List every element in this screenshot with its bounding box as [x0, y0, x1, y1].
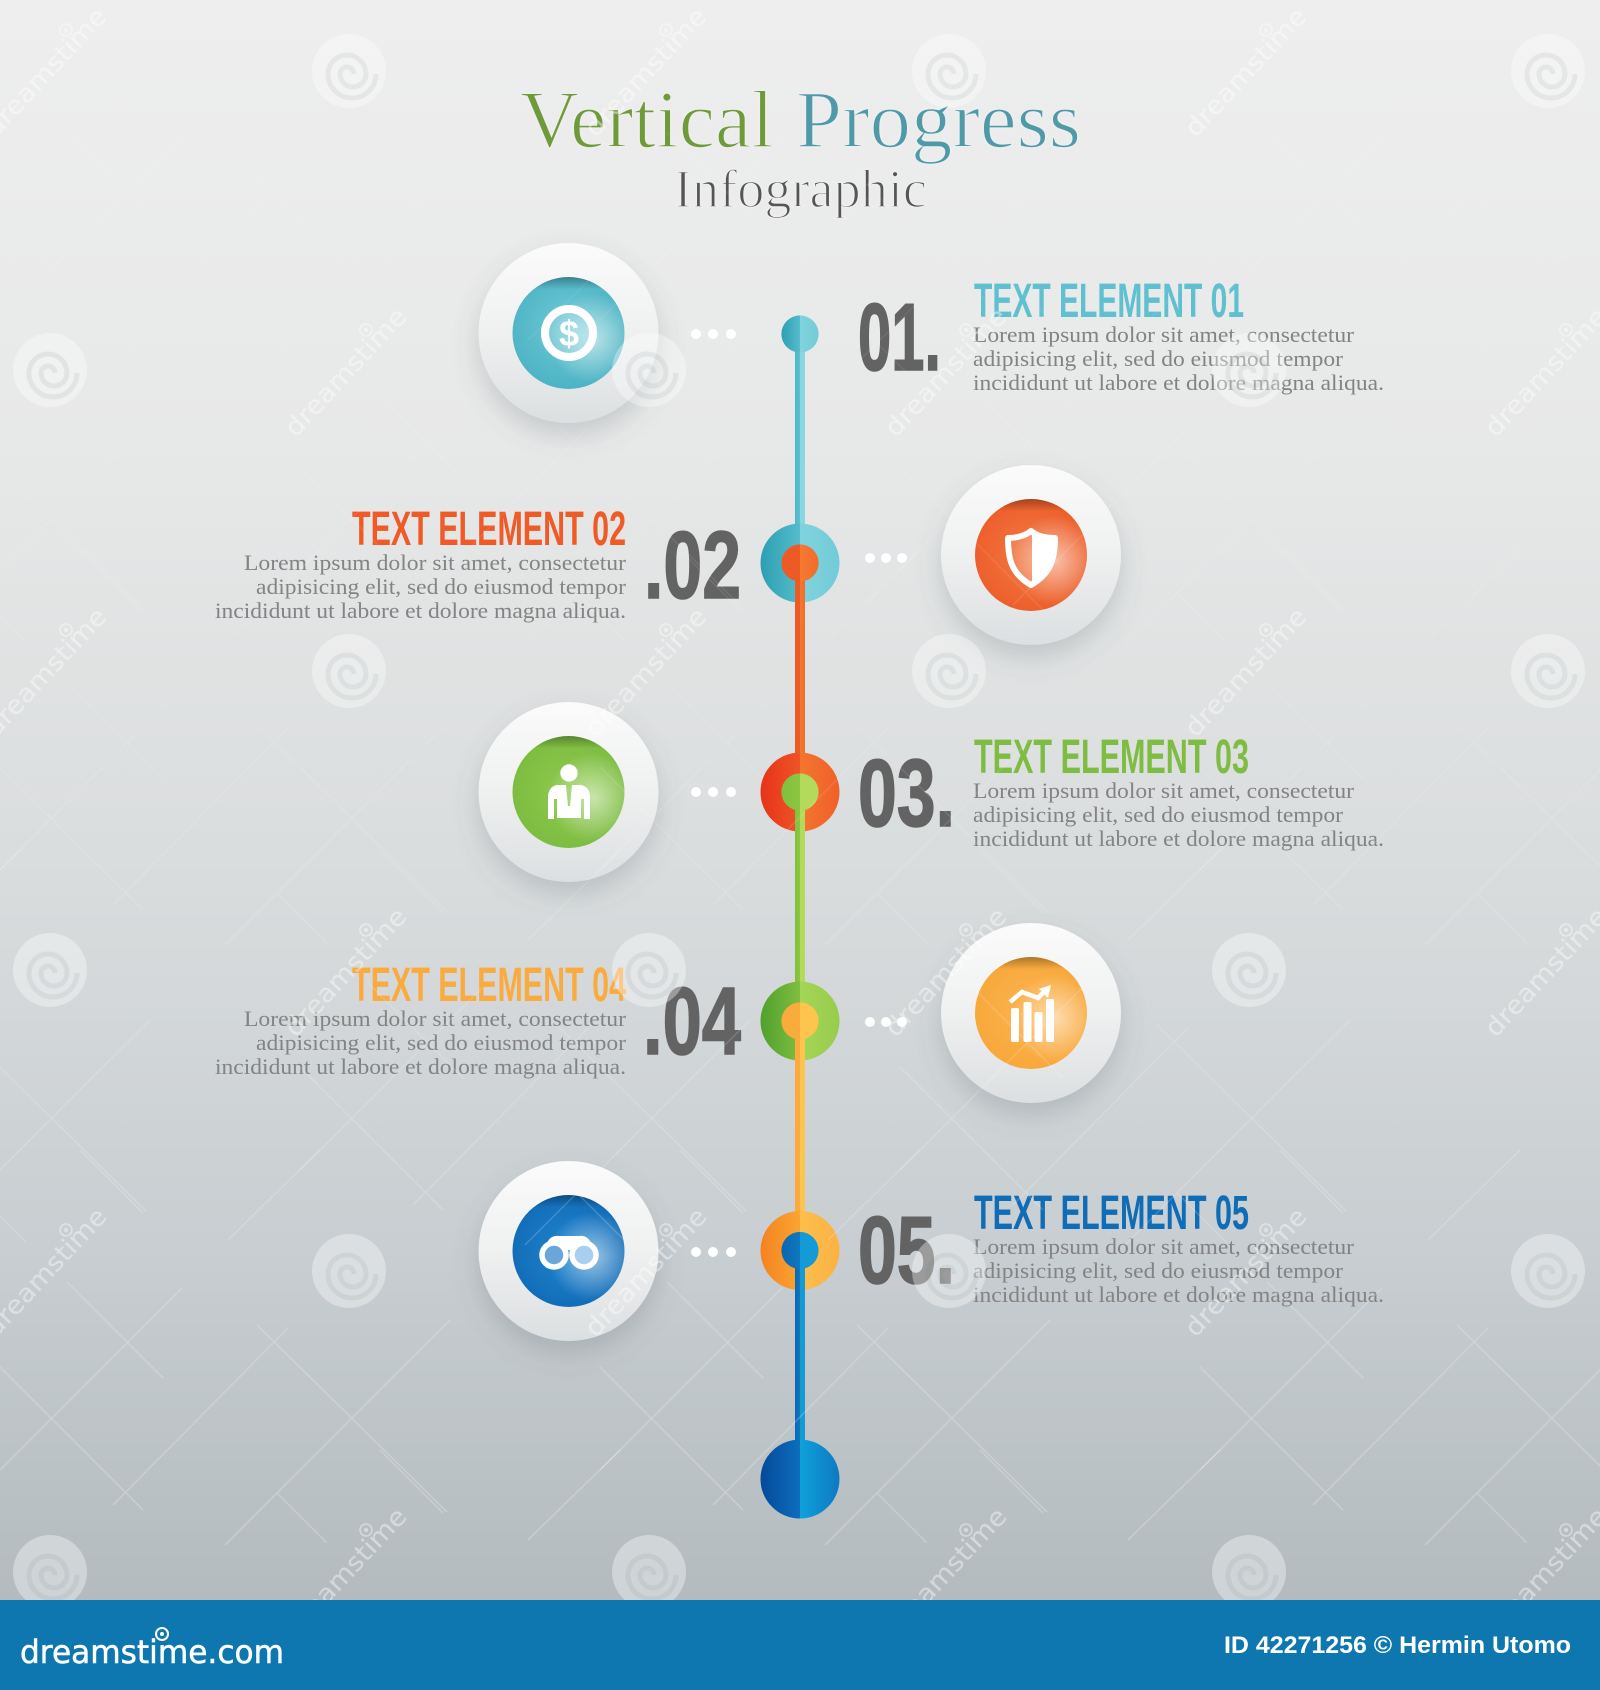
- title line: Vertical Progress: Vertical: [520, 74, 774, 165]
- number 02: .02: [644, 512, 741, 619]
- watermark overlay: dreamstime: [1179, 602, 1313, 743]
- footer credit: ID 42271256 © Hermin Utomo: [1224, 1632, 1571, 1659]
- icon: binoculars: [542, 1236, 596, 1267]
- body 01: [973, 322, 1384, 395]
- step 02: [215, 503, 741, 623]
- footer logo: dreamstime.com: [20, 1633, 284, 1671]
- step 03: [858, 731, 1384, 851]
- number 03: 03.: [858, 740, 955, 847]
- title line: Vertical Progress: Progress: [796, 74, 1081, 165]
- stem: blue: [795, 1251, 805, 1479]
- node 04 ring: [760, 982, 840, 1060]
- watermark overlay: dreamstime: [279, 902, 413, 1043]
- watermark overlay: dreamstime: [579, 602, 713, 743]
- title line: Vertical Progress: [520, 74, 1081, 165]
- button 04: chart: [941, 923, 1121, 1103]
- icon: rising bar chart: [1010, 985, 1054, 1042]
- body 02: Lorem ipsum dolor sit amet, consectetur: [244, 550, 627, 575]
- heading 01: TEXT ELEMENT 01: [974, 275, 1244, 328]
- start node: [781, 315, 819, 353]
- subtitle: Infographic: Infographic: [674, 159, 927, 219]
- body 03: Lorem ipsum dolor sit amet, consectetur: [973, 778, 1355, 803]
- body 04: adipisicing elit, sed do eiusmod tempor: [256, 1030, 627, 1055]
- body 05: adipisicing elit, sed do eiusmod tempor: [973, 1258, 1344, 1283]
- end node: [760, 1440, 840, 1518]
- body 03: incididunt ut labore et dolore magna aliqua.: [973, 826, 1384, 851]
- watermark overlay: dreamstime: [1179, 1202, 1313, 1343]
- watermark overlay: dreamstime: [879, 902, 1013, 1043]
- title: [520, 74, 1081, 219]
- connector dots 01: [691, 329, 736, 339]
- body 01: Lorem ipsum dolor sit amet, consectetur: [973, 322, 1355, 347]
- watermark overlay: dreamstime: [879, 302, 1013, 443]
- button 01: dollar: [478, 243, 658, 423]
- number 04: .04: [643, 968, 741, 1075]
- watermark overlay: dreamstime: [279, 1502, 413, 1643]
- icon: shield: [1008, 531, 1055, 585]
- step 01: [858, 275, 1384, 395]
- heading 03: TEXT ELEMENT 03: [974, 731, 1249, 784]
- watermark overlay: dreamstime: [1179, 2, 1313, 143]
- connector dots 05: [691, 1247, 736, 1257]
- stem: green: [795, 792, 805, 1021]
- heading 05: TEXT ELEMENT 05: [974, 1187, 1249, 1240]
- node 04 centre: [781, 1002, 819, 1040]
- connector dots 03: [691, 787, 736, 797]
- body 05: [973, 1234, 1384, 1307]
- watermark overlay: dreamstime: [879, 1502, 1013, 1643]
- footer banner: [0, 1600, 1600, 1690]
- step 05: [858, 1187, 1384, 1307]
- number 05: 05.: [858, 1197, 955, 1304]
- watermark overlay: dreamstime: [579, 2, 713, 143]
- step 04: [215, 959, 741, 1079]
- body 02: adipisicing elit, sed do eiusmod tempor: [256, 574, 627, 599]
- button 03: person: [478, 702, 658, 882]
- button 02: shield: [941, 465, 1121, 645]
- connector dots 02: [865, 553, 907, 563]
- stem: orange: [795, 563, 805, 792]
- heading 02: TEXT ELEMENT 02: [352, 503, 626, 556]
- node 02 ring: [760, 524, 840, 602]
- body 04: incididunt ut labore et dolore magna aliqua.: [215, 1054, 626, 1079]
- icon: dollar coin: $: [559, 313, 579, 354]
- node 03 ring: [760, 752, 840, 832]
- watermark overlay: dreamstime: [279, 302, 413, 443]
- body 03: adipisicing elit, sed do eiusmod tempor: [973, 802, 1344, 827]
- watermark overlay: dreamstime: [579, 1202, 713, 1343]
- body 02: incididunt ut labore et dolore magna aliqua.: [215, 598, 626, 623]
- body 01: incididunt ut labore et dolore magna aliqua.: [973, 370, 1384, 395]
- body 04: Lorem ipsum dolor sit amet, consectetur: [244, 1006, 627, 1031]
- icon: dollar coin: [545, 309, 593, 357]
- node 03 centre: [781, 773, 819, 811]
- connector dots 04: [865, 1017, 907, 1027]
- body 03: [973, 778, 1384, 851]
- stem: teal: [795, 334, 805, 563]
- body 04: [215, 1006, 627, 1079]
- number 01: 01.: [858, 284, 941, 391]
- node 02 centre: [781, 544, 819, 582]
- body 02: [215, 550, 627, 623]
- node 05 ring: [760, 1211, 840, 1290]
- button 05: binoculars: [478, 1161, 658, 1341]
- body 05: incididunt ut labore et dolore magna aliqua.: [973, 1282, 1384, 1307]
- stem: yellow: [795, 1021, 805, 1251]
- body 01: adipisicing elit, sed do eiusmod tempor: [973, 346, 1344, 371]
- body 05: Lorem ipsum dolor sit amet, consectetur: [973, 1234, 1355, 1259]
- vertical timeline: [760, 315, 840, 1518]
- icon: person: [548, 764, 590, 819]
- heading 04: TEXT ELEMENT 04: [352, 959, 626, 1012]
- node 05 centre: [781, 1232, 819, 1269]
